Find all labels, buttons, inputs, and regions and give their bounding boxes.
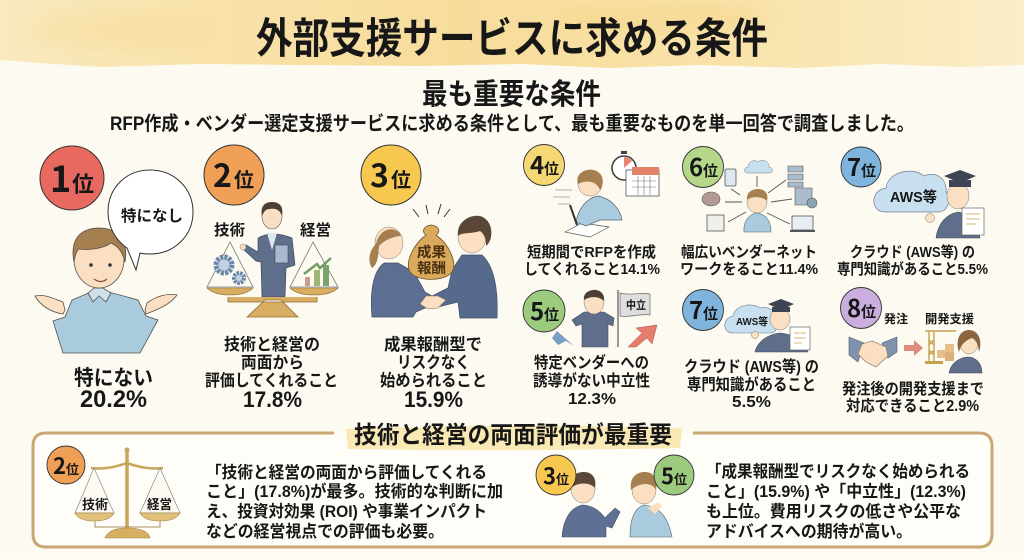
bag text: 報酬 (417, 260, 446, 276)
scale label: 経営: 経営 (147, 497, 172, 512)
illustration: handshake with reward bag (369, 204, 497, 318)
bag text: 成果 (417, 244, 446, 260)
label: 技術: 技術 (214, 221, 245, 239)
section description: RFP作成・ベンダー選定支援サービスに求める条件として、最も重要なものを単一回答で調査しました。 (110, 112, 914, 135)
panel: rank 8 (840, 288, 984, 415)
cloud text: AWS等 (736, 315, 768, 328)
badge: 1位 (40, 146, 104, 210)
label: 特にない 20.2%: 20.2% (80, 386, 147, 413)
badge: 2位: 2 (53, 449, 66, 481)
illustration: person shrugging (35, 228, 177, 353)
label: 5.5%: クラウド (AWS等) の (850, 243, 975, 261)
badge: 3位 (361, 145, 421, 205)
header watercolor band (0, 0, 1024, 68)
illustration: balance with technology and management (207, 202, 338, 317)
illustration: order to development support (849, 330, 982, 373)
label: 経営: 経営 (300, 221, 331, 239)
text: left explanation: え、投資対効果 (ROI) や事業インパクト (206, 501, 487, 521)
label: technology and management 17.8% (205, 335, 338, 412)
label: 12.3%: 誘導がない中立性 (533, 371, 650, 390)
label: technology and management 17.8%: 17.8% (243, 387, 302, 412)
text: right explanation: も上位。費用リスクの低さや公平な (706, 502, 961, 521)
badge: 7位: 7 (689, 291, 703, 326)
illustration: man writing with clock and calendar (553, 151, 659, 237)
badge: 8位: 位 (861, 301, 876, 322)
badge: 4位: 位 (544, 158, 559, 179)
illustration: neutral flag (552, 290, 657, 347)
label: 12.3%: 12.3% (568, 391, 616, 408)
flag text: 中立 (626, 298, 646, 312)
label: 5.5% (684, 357, 819, 411)
text: left explanation: こと」(17.8%)が最多。技術的な判断に加 (206, 481, 503, 501)
badge: 5位 (654, 455, 694, 495)
badge: 5位: 位 (544, 304, 559, 325)
illustration: vendor network (702, 160, 817, 232)
text: left explanation (206, 463, 503, 541)
badge: 7位: 位 (861, 160, 876, 181)
panel: rank 3 (361, 145, 497, 412)
illustration: cloud and expert (874, 170, 984, 238)
badge: 3位: 3 (370, 151, 389, 197)
label: reward 15.9%: 始められること (380, 371, 487, 390)
text: right explanation: こと」(15.9%) や「中立性」(12.3%) (706, 482, 966, 501)
label: 11.4%: 幅広いベンダーネット (681, 243, 817, 261)
label: 特にない 20.2% (74, 367, 153, 413)
label: technology and management 17.8%: 評価してくれること (205, 371, 338, 390)
badge: 2位 (204, 145, 264, 205)
title: 外部支援サービスに求める条件 (256, 5, 768, 66)
badge: 5位: 5 (530, 292, 544, 327)
label: 14.1%: 短期間でRFPを作成 (527, 243, 656, 261)
panel: rank 6 (680, 146, 818, 278)
label: 2.9%: 発注後の開発支援まで (842, 379, 984, 398)
scale label: 技術: 技術 (82, 497, 108, 512)
text: left explanation: 「技術と経営の両面から評価してくれる (206, 463, 487, 482)
label: 特にない 20.2%: 特にない (74, 367, 153, 390)
badge: 4位: 4 (530, 146, 544, 181)
label: 5.5%: 5.5% (732, 394, 771, 411)
text: right explanation: 「成果報酬型でリスクなく始められる (706, 461, 970, 481)
summary frame (33, 433, 992, 547)
label: reward 15.9%: 成果報酬型で (384, 334, 482, 354)
illustration: cloud and expert small (725, 299, 810, 352)
label: 12.3% (533, 353, 650, 408)
badge: 1位: 1 (50, 151, 71, 203)
label: 11.4%: ワークをること11.4% (680, 261, 818, 278)
panel: summary (33, 415, 992, 547)
label: 5.5% (837, 243, 988, 278)
bubble text: 特になし (121, 206, 183, 225)
panel: rank 7 lower (682, 290, 819, 411)
label: 2.9%: 対応できること2.9% (846, 397, 979, 415)
badge: 3位: 位 (391, 164, 411, 193)
badge: 3位: 3 (543, 459, 556, 491)
speech bubble (108, 170, 193, 270)
summary heading: 技術と経営の両面評価が最重要 (354, 415, 672, 450)
panel: rank 1 (35, 146, 193, 413)
label: 5.5%: 専門知識があること (687, 375, 816, 394)
cloud text: AWS等 (890, 188, 937, 206)
badge: 3位 (536, 455, 576, 495)
bag text (417, 244, 446, 276)
badge: 7位: 7 (847, 148, 861, 183)
panel: rank 7 upper (837, 147, 988, 278)
label: 5.5%: 専門知識があること5.5% (837, 260, 988, 278)
label: 開発支援: 開発支援 (925, 311, 974, 326)
label: 14.1%: してくれること14.1% (524, 261, 660, 278)
badge: 2位: 位 (66, 459, 79, 478)
label: 2.9% (842, 379, 984, 415)
label: 12.3%: 特定ベンダーへの (534, 353, 649, 372)
text: left explanation: などの経営視点での評価も必要。 (206, 522, 444, 541)
badge: 6位: 位 (703, 160, 718, 181)
badge: 7位 (682, 290, 724, 330)
panel: rank 2 (204, 145, 338, 412)
summary heading highlight (346, 426, 682, 450)
badge: 2位: 2 (213, 151, 232, 197)
label: 5.5%: クラウド (AWS等) の (684, 357, 819, 376)
label: 発注: 発注 (884, 311, 908, 326)
badge: 2位 (47, 446, 85, 484)
panel: rank 5 (523, 290, 657, 408)
section heading: 最も重要な条件 (422, 71, 601, 113)
label: technology and management 17.8%: 両面から (241, 353, 304, 372)
badge: 3位: 位 (556, 469, 569, 488)
badge: 6位: 6 (689, 148, 703, 183)
text: right explanation (706, 461, 970, 541)
label: 14.1% (524, 243, 660, 278)
label: 11.4% (680, 243, 818, 278)
label: reward 15.9% (380, 334, 487, 412)
badge: 5位: 5 (661, 459, 674, 491)
label: reward 15.9%: リスクなく (397, 353, 470, 372)
label: technology and management 17.8%: 技術と経営の (224, 335, 320, 354)
badge: 7位: 位 (703, 303, 718, 324)
badge: 7位 (841, 147, 881, 187)
panel: rank 4 (524, 144, 660, 278)
illustration: two people (562, 472, 672, 537)
badge: 1位: 位 (72, 167, 94, 199)
badge: 5位 (523, 290, 565, 332)
badge: 5位: 位 (674, 469, 687, 488)
badge: 6位 (682, 146, 724, 188)
badge: 2位: 位 (234, 164, 254, 193)
badge: 8位 (840, 288, 882, 328)
text: right explanation: アドバイスへの期待が高い。 (706, 521, 912, 541)
label: reward 15.9%: 15.9% (404, 387, 463, 412)
badge: 4位 (524, 144, 564, 186)
icon: balance scale (75, 448, 180, 538)
badge: 8位: 8 (847, 289, 861, 324)
